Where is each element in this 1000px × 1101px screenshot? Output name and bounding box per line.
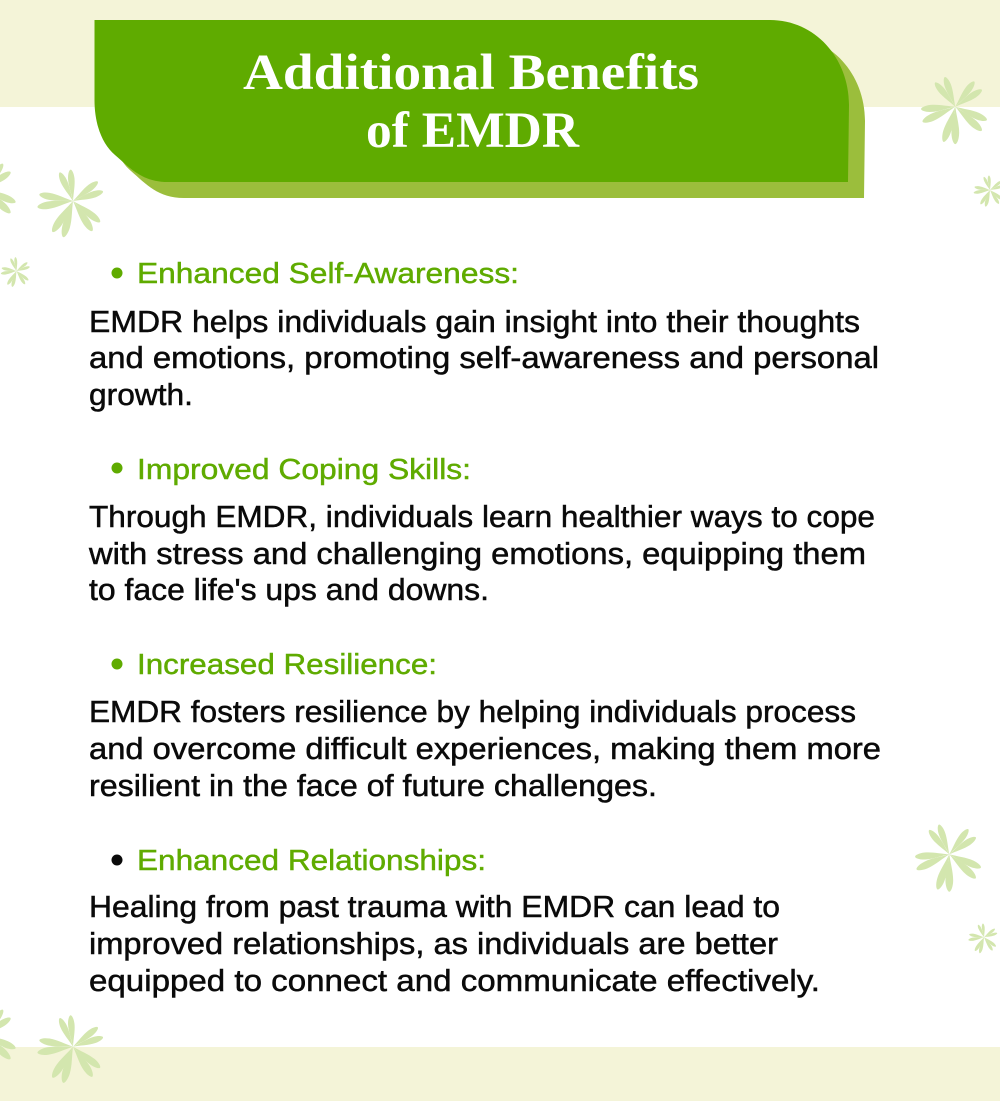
body text: equipped to connect and communicate effectively. [89, 964, 820, 998]
heading: Enhanced Self-Awareness: [137, 258, 519, 290]
benefit: enhanced relationships [89, 845, 820, 998]
icon: flower bottom left [30, 1008, 113, 1091]
body text: to face life's ups and downs. [89, 573, 489, 607]
benefit: enhanced self-awareness [89, 258, 879, 412]
heading: Enhanced Relationships: [137, 845, 486, 877]
body text: EMDR helps individuals gain insight into their thoughts [89, 305, 860, 339]
body text: improved relationships, as individuals are better [89, 927, 778, 961]
title: Additional Benefits [243, 45, 699, 101]
body text: and overcome difficult experiences, making them more [89, 732, 881, 766]
bullet [112, 268, 122, 278]
body text: EMDR fosters resilience by helping individuals process [89, 695, 856, 729]
banner shadow [110, 36, 865, 198]
bullet [112, 658, 122, 670]
icon: small flower lower right [965, 920, 1000, 957]
bottom background band [0, 1047, 1000, 1101]
bullet [112, 462, 122, 474]
body text [89, 890, 820, 998]
top background band [0, 0, 1000, 107]
heading: Improved Coping Skills: [137, 454, 471, 486]
icon: flower top right [921, 76, 988, 144]
title: of EMDR [366, 103, 580, 159]
body text [89, 695, 881, 803]
body text [88, 500, 875, 607]
body text: resilient in the face of future challenges. [89, 769, 657, 803]
body text: Through EMDR, individuals learn healthier ways to cope [89, 500, 875, 534]
title [243, 45, 699, 159]
icon: small flower top right [970, 172, 1000, 211]
icon: flower lower right [915, 824, 982, 892]
heading: Increased Resilience: [137, 649, 437, 681]
body text: with stress and challenging emotions, equipping them [88, 537, 866, 571]
title banner [94, 20, 865, 198]
icon: flower bottom left partial [0, 1004, 17, 1072]
benefit: improved coping skills [88, 454, 875, 607]
body text: growth. [89, 378, 193, 412]
icon: small flower left [0, 254, 34, 291]
body text [89, 305, 879, 412]
bullet [112, 854, 122, 866]
icon: flower top left partial [0, 158, 17, 226]
body text: and emotions, promoting self-awareness and personal [89, 341, 879, 375]
icon: flower top left [30, 162, 113, 246]
banner panel [94, 20, 849, 182]
body text: Healing from past trauma with EMDR can lead to [89, 890, 780, 924]
benefit: increased resilience [89, 649, 881, 803]
